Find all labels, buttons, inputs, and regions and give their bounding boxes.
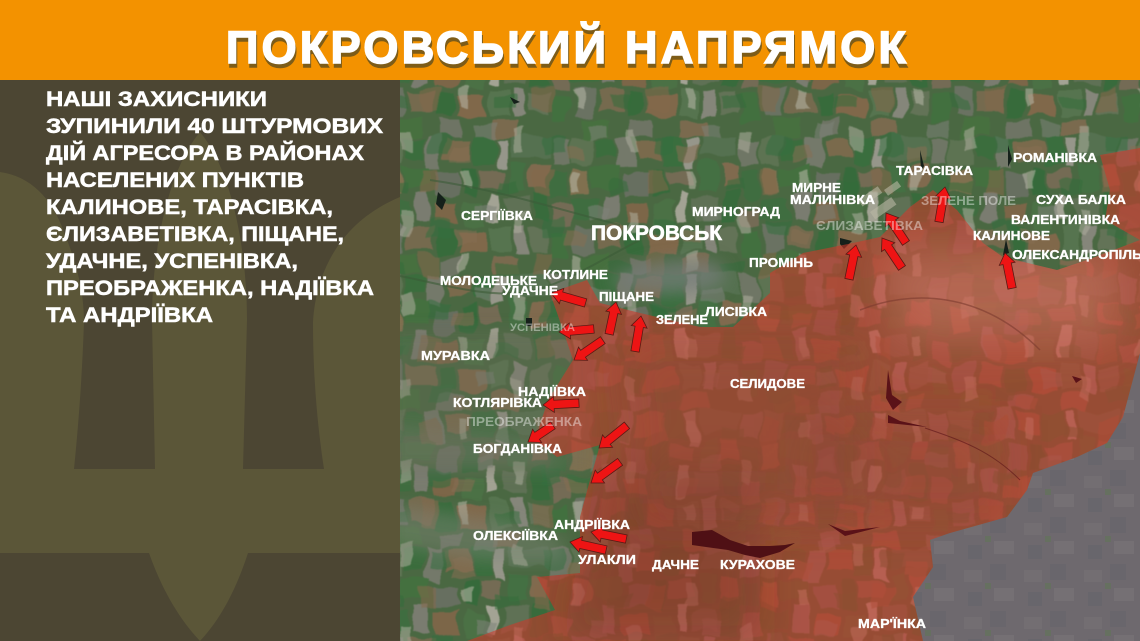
arrow: towards Andriivka: [589, 524, 628, 547]
map region: occupied territory (red overlay): [467, 148, 1140, 641]
map region: tonal variation inside occupied territory: [560, 250, 1120, 640]
map labels: [421, 151, 1140, 631]
arrow: towards Zelene: [627, 315, 649, 353]
label: Uspenivka: УСПЕНІВКА: [510, 322, 575, 334]
text block: summary: [46, 87, 384, 327]
map: satellite view of the Pokrovsk direction: [360, 60, 1140, 641]
arrow: towards Yelyzavetivka north: [879, 209, 913, 247]
map detail: roads and ponds: [400, 180, 640, 293]
label: Promin: ПРОМІНЬ: [749, 256, 813, 270]
arrows: assault directions: [524, 186, 1020, 558]
label: Kurakhove: КУРАХОВЕ: [720, 558, 795, 572]
arrow: towards Malynivka: [841, 243, 864, 281]
label: Ulakly: УЛАКЛИ: [578, 553, 636, 567]
label: Lysivka: ЛИСІВКА: [705, 305, 767, 319]
label: Pokrovsk: ПОКРОВСЬК: [591, 222, 722, 245]
text block: summary: ТА АНДРІЇВКА: [46, 303, 213, 327]
label: Marinka: МАР'ЇНКА: [858, 616, 926, 631]
arrow: south-west near Uspenivka: [569, 334, 607, 367]
map detail: bright fields near Yelyzavetivka: [858, 181, 901, 219]
label: Malynivka: МАЛИНІВКА: [790, 193, 875, 207]
text block: summary: КАЛИНОВЕ, ТАРАСІВКА,: [46, 195, 333, 219]
label: Preobrazhenka: ПРЕОБРАЖЕНКА: [466, 415, 582, 429]
arrow: towards Ulakly: [568, 534, 608, 558]
text block: summary: НАСЕЛЕНИХ ПУНКТІВ: [46, 168, 304, 192]
label: Zelene: ЗЕЛЕНЕ: [656, 313, 708, 327]
title bar: [0, 0, 1140, 80]
icon: trident watermark: [0, 132, 400, 641]
label: Dachne: ДАЧНЕ: [652, 558, 699, 572]
map region: south-west tint: [390, 260, 725, 560]
label: Yelyzavetivka: ЄЛИЗАВЕТІВКА: [816, 219, 923, 233]
text block: summary: ЗУПИНИЛИ 40 ШТУРМОВИХ: [46, 114, 384, 138]
text block: summary: УДАЧНЕ, УСПЕНІВКА,: [46, 249, 298, 273]
arrow: towards Tarasivka: [931, 186, 953, 223]
map detail: dark gullies: [828, 370, 1082, 536]
arrow: towards Udachne: [549, 285, 588, 311]
text block: summary: ЄЛИЗАВЕТІВКА, ПІЩАНЕ,: [46, 222, 344, 246]
label: Zelene Pole: ЗЕЛЕНЕ ПОЛЕ: [921, 194, 1016, 208]
label: Andriivka: АНДРІЇВКА: [554, 517, 630, 532]
title: ПОКРОВСЬКИЙ НАПРЯМОК: [226, 22, 907, 73]
label: Sukha Balka: СУХА БАЛКА: [1036, 193, 1126, 207]
label: Valentynivka: ВАЛЕНТИНІВКА: [1011, 213, 1120, 227]
arrow: towards Kalynove: [997, 251, 1020, 290]
panel: left summary with trident background: [0, 80, 400, 641]
label: Molodetske: МОЛОДЕЦЬКЕ: [440, 274, 537, 288]
map detail: Kurakhove reservoir: [692, 530, 795, 558]
label: Muravka: МУРАВКА: [421, 349, 490, 363]
label: Romanivka: РОМАНІВКА: [1013, 151, 1097, 165]
label: Pishchane: ПІЩАНЕ: [599, 290, 654, 304]
label: Kotliarivka: КОТЛЯРІВКА: [453, 396, 542, 410]
label: Oleksandropil: ОЛЕКСАНДРОПІЛЬ: [1012, 248, 1140, 262]
arrow: towards Yelyzavetivka south: [875, 234, 909, 272]
label: Selydove: СЕЛИДОВЕ: [730, 377, 805, 391]
label: Myrne: МИРНЕ: [792, 181, 841, 195]
label: Serhiivka: СЕРГІЇВКА: [461, 208, 533, 223]
title: ПОКРОВСЬКИЙ НАПРЯМОК: [227, 26, 908, 77]
label: Tarasivka: ТАРАСІВКА: [896, 164, 973, 178]
map region: Donetsk urban area: [913, 353, 1140, 641]
text block: summary: ДІЙ АГРЕСОРА В РАЙОНАХ: [46, 140, 365, 165]
arrow: towards Kotliarivka: [543, 395, 579, 413]
arrow: towards Bohdanivka: [524, 419, 557, 449]
label: Kalynove: КАЛИНОВЕ: [973, 229, 1050, 243]
label: Udachne: УДАЧНЕ: [502, 284, 558, 298]
label: Kotlyne: КОТЛИНЕ: [543, 268, 608, 282]
arrow: towards Preobrazhenka: [594, 419, 632, 454]
label: Oleksiivka: ОЛЕКСІЇВКА: [473, 528, 558, 543]
text block: summary: НАШІ ЗАХИСНИКИ: [46, 87, 267, 111]
text block: summary: ПРЕОБРАЖЕНКА, НАДІЇВКА: [46, 276, 374, 300]
label: Myrnohrad: МИРНОГРАД: [692, 205, 780, 219]
arrow: towards Pishchane: [601, 300, 624, 336]
label: Bohdanivka: БОГДАНІВКА: [473, 442, 562, 456]
arrow: towards Uspenivka: [558, 321, 595, 340]
arrow: central south-west: [586, 455, 625, 489]
label: Nadiivka: НАДІЇВКА: [518, 384, 586, 399]
